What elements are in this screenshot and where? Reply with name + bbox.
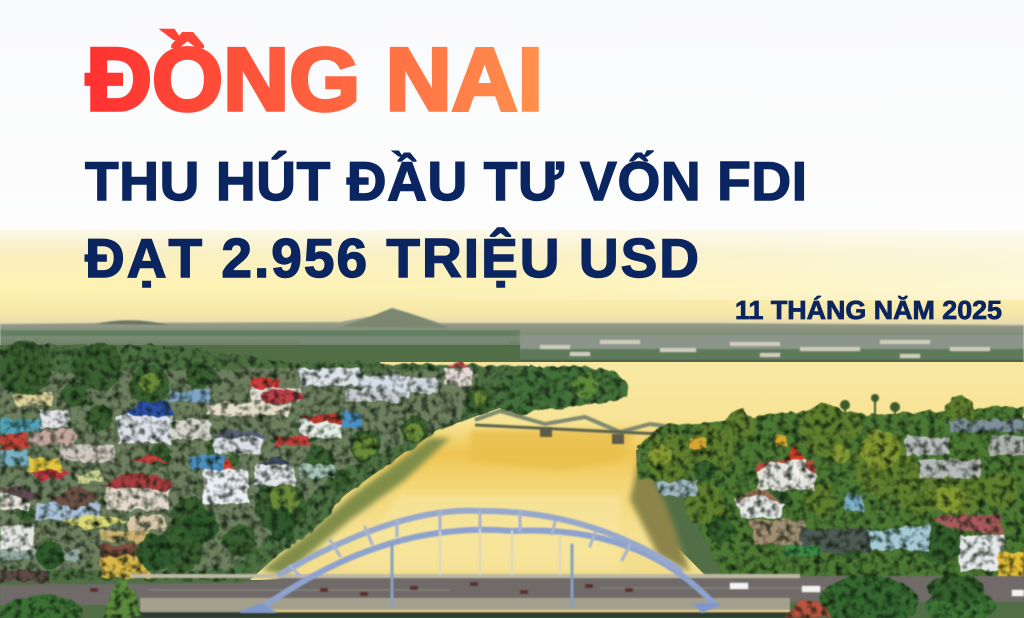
trees: waterfront foreground	[36, 508, 297, 570]
trees: right bank	[646, 396, 1018, 525]
background sky	[0, 0, 1024, 325]
photo: river sliver behind town	[380, 362, 530, 368]
photo: far horizon land	[0, 308, 1024, 370]
date label: 11 THÁNG NĂM 2025	[735, 295, 1002, 325]
photo: palm trees on far shore	[840, 394, 900, 415]
photo: left bank with town	[0, 341, 534, 582]
photo: right bank	[638, 396, 1024, 578]
photo: river island	[500, 366, 628, 412]
houses: right bank	[655, 420, 1024, 578]
photo: land base	[0, 345, 1024, 618]
photo: road and bridge deck	[0, 574, 1024, 618]
photo: arch bridge	[240, 511, 720, 612]
photo: river	[250, 362, 1024, 580]
heading: thu hút đầu tư vốn FDI: THU HÚT ĐẦU TƯ VỐN FDI	[85, 150, 807, 212]
heading: đạt 2.956 triệu USD: ĐẠT 2.956 TRIỆU USD	[85, 227, 699, 289]
houses: left bank	[0, 362, 472, 582]
photo: foreground trees	[0, 574, 994, 618]
photo: river reflections	[262, 430, 690, 575]
vehicles on road	[730, 583, 1024, 596]
photo: old truss bridge	[475, 411, 680, 444]
title: Đồng Nai: ĐỒNG NAI	[86, 29, 543, 129]
trees: left bank upper	[0, 341, 534, 572]
